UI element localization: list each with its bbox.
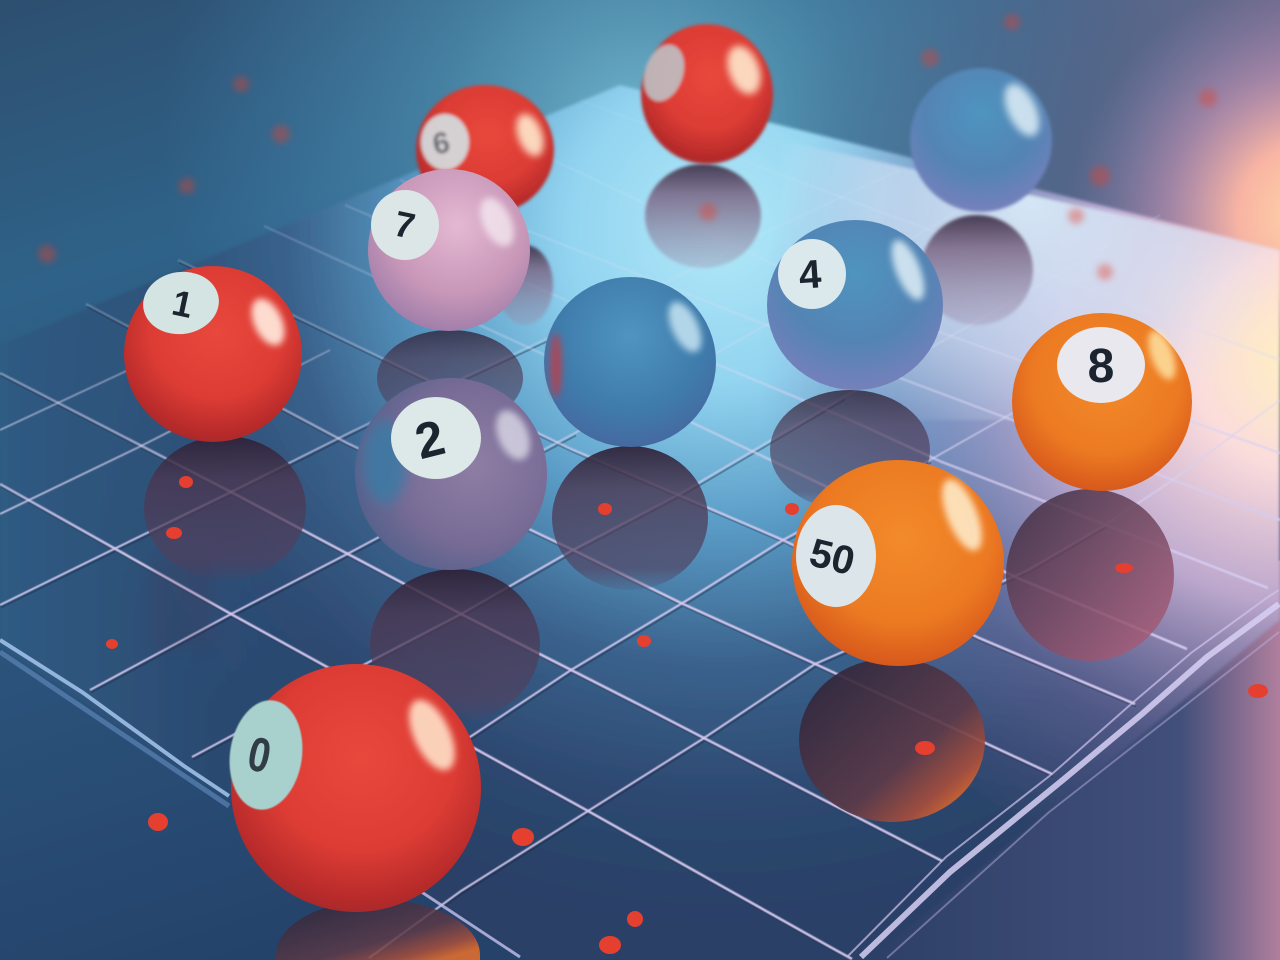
- board edge: [0, 590, 1279, 958]
- number disc: [637, 40, 691, 106]
- orange ball 8: [1012, 313, 1192, 491]
- red ball 6: [416, 85, 554, 215]
- red ball 0: 0: [243, 727, 276, 784]
- slate ball 2: 2: [410, 409, 450, 470]
- red ball 1: [124, 266, 302, 442]
- orange ball 50: [792, 460, 1004, 666]
- blue ball (centre): [544, 277, 716, 447]
- pink ball 7: 7: [391, 203, 419, 247]
- red ball 6: 6: [430, 126, 452, 161]
- blue ball 4: [767, 220, 943, 390]
- orange ball 50: 50: [805, 531, 859, 584]
- blue ball 4: 4: [797, 252, 823, 298]
- ball reflections: [144, 164, 1174, 960]
- pink ball 7: [368, 169, 530, 331]
- slate ball 2: [355, 378, 547, 570]
- grid shadow lines: [1, 262, 1136, 960]
- red ball 0: [223, 664, 481, 912]
- orange ball 8: 8: [1088, 340, 1114, 393]
- blue ball (top right): [910, 68, 1052, 212]
- red ball (top centre): [637, 24, 773, 164]
- red ball 1: 1: [169, 282, 197, 326]
